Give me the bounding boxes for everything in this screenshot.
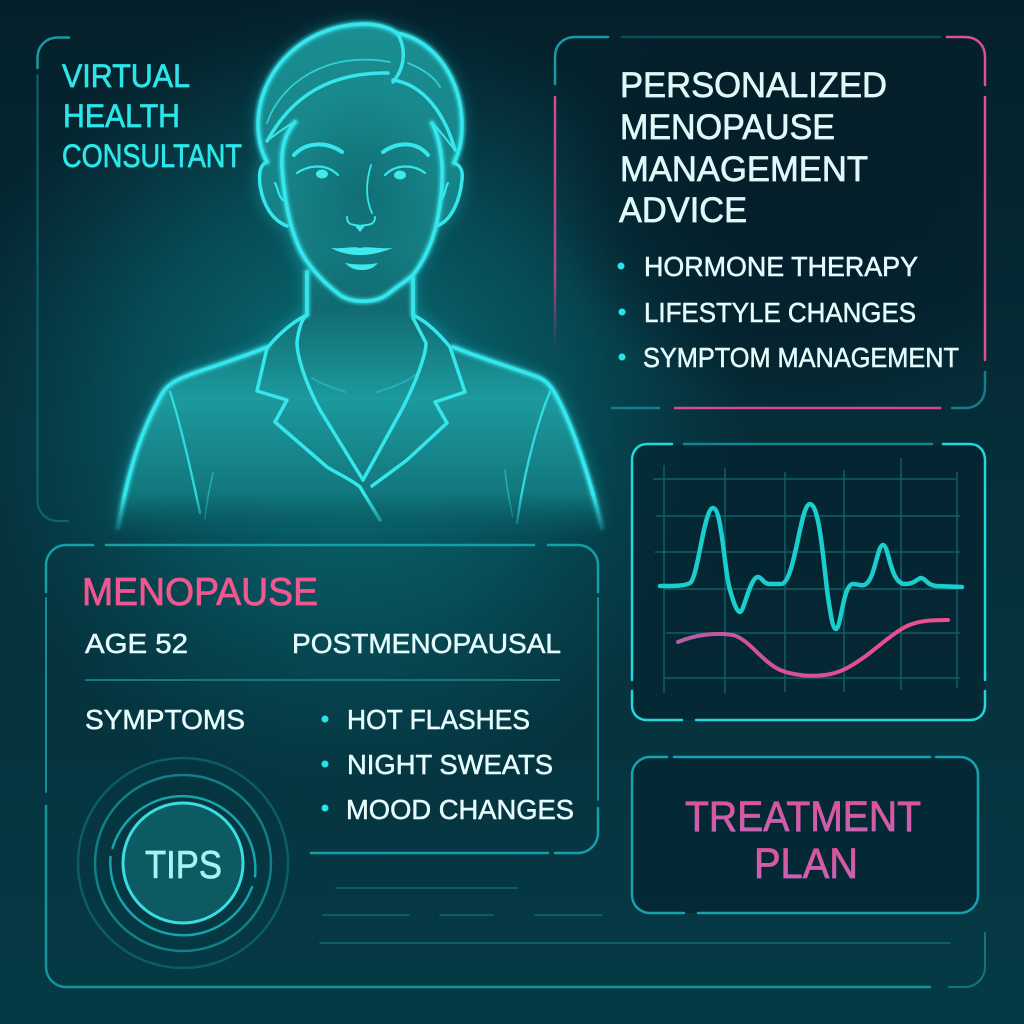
heading: virtual health consultant: CONSULTANT: [62, 138, 242, 174]
line chart: cyan wave: [660, 504, 962, 629]
neck: [307, 272, 413, 315]
ears: [260, 162, 462, 226]
age and status: AGE 52: [85, 628, 188, 659]
panel: menopause patient profile: [46, 545, 985, 987]
symptoms list: [322, 704, 574, 825]
inner collar: [297, 315, 426, 480]
hologram figure: virtual consultant: [118, 24, 602, 528]
symptoms label: SYMPTOMS: [85, 704, 245, 735]
treatment plan label: [685, 793, 921, 888]
tips badge: TIPS: [145, 844, 222, 887]
heading: virtual health consultant: VIRTUAL: [62, 58, 190, 94]
panel heading: MENOPAUSE: [620, 108, 835, 147]
hair strands: [267, 60, 440, 123]
face outline: [282, 122, 442, 301]
panel: treatment plan: [632, 757, 978, 913]
shoulders: [118, 347, 602, 528]
treatment plan label: TREATMENT: [685, 793, 921, 841]
left lapel: [257, 315, 380, 520]
symptoms list: HOT FLASHES: [347, 704, 530, 735]
age and status: POSTMENOPAUSAL: [292, 628, 561, 659]
panel heading: PERSONALIZED: [620, 66, 887, 105]
eyebrows: [294, 144, 428, 155]
advice list: [618, 251, 959, 373]
chart grid: [653, 458, 960, 693]
symptoms list: MOOD CHANGES: [346, 794, 574, 825]
line chart: pink curve: [678, 620, 948, 676]
eyes and lips: [316, 170, 406, 270]
sleeve folds: [170, 392, 550, 523]
panel: personalized menopause management advice: [555, 37, 985, 408]
eye lids: [297, 166, 425, 175]
tips badge: [78, 758, 288, 968]
panel heading: ADVICE: [619, 191, 747, 230]
treatment plan label: PLAN: [754, 840, 858, 888]
hair tufts at temples: [267, 122, 455, 150]
panel title: MENOPAUSE: [82, 571, 318, 614]
advice list: LIFESTYLE CHANGES: [644, 297, 916, 328]
heading: virtual health consultant: [62, 58, 242, 174]
hair outline: [258, 24, 462, 163]
panel: virtual health consultant frame: [38, 38, 69, 521]
nose: [367, 165, 372, 213]
panel: chart monitor: [632, 444, 985, 720]
panel heading: MANAGEMENT: [620, 150, 868, 189]
age and status: [85, 628, 561, 659]
panel heading: [619, 66, 887, 230]
right lapel: [372, 315, 465, 486]
heading: virtual health consultant: HEALTH: [63, 98, 180, 134]
symptoms list: NIGHT SWEATS: [347, 749, 553, 780]
hair part and hairline: [267, 33, 455, 150]
advice list: HORMONE THERAPY: [644, 251, 918, 282]
collarbones: [312, 375, 415, 392]
advice list: SYMPTOM MANAGEMENT: [643, 342, 959, 373]
